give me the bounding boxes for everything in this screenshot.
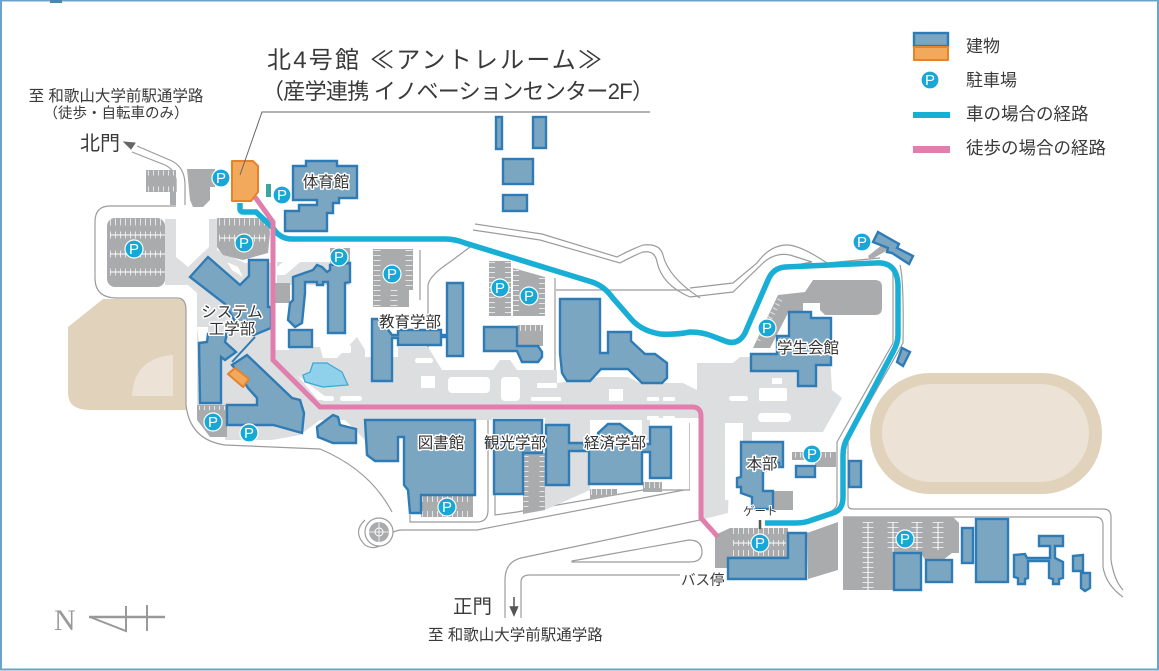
- walking route: [255, 197, 718, 537]
- gate marker: [759, 520, 761, 529]
- station route label: 至 和歌山大学前駅通学路: [428, 626, 603, 644]
- arrow: north gate: [124, 142, 135, 149]
- building labels: 観光学部: [484, 434, 546, 452]
- target building: north 4: [232, 161, 258, 201]
- building labels: 本部: [746, 455, 778, 473]
- car route: [240, 203, 898, 523]
- student hall: [751, 312, 831, 386]
- north compass: N: [54, 604, 76, 637]
- tourism: [494, 420, 542, 494]
- building labels: 教育学部: [379, 313, 441, 331]
- parking markers: P: [216, 170, 226, 187]
- roundabout: [365, 518, 393, 546]
- building labels: [201, 173, 839, 473]
- parking markers: P: [524, 288, 534, 305]
- north gate labels: 北門: [80, 132, 120, 155]
- gate label: ゲート: [743, 505, 778, 518]
- parking markers: P: [807, 446, 817, 463]
- north compass: [54, 604, 165, 637]
- subtitle: （産学連携 イノベーションセンター2F）: [262, 79, 654, 104]
- legend: car route: 車の場合の経路: [966, 104, 1089, 124]
- economics: [546, 424, 671, 485]
- parking lots: [107, 169, 959, 590]
- south east buildings: [728, 519, 1090, 591]
- title: 北4号館 ≪アントレルーム≫: [267, 47, 602, 74]
- arrow: main gate: [510, 597, 518, 615]
- north gate labels: 至 和歌山大学前駅通学路: [29, 87, 204, 105]
- gymnasium: [285, 161, 357, 231]
- legend: car route: [913, 104, 1089, 124]
- bus stop label: バス停: [681, 572, 724, 589]
- teal structure: [266, 184, 271, 197]
- north gate labels: [29, 87, 204, 155]
- parking markers: P: [244, 425, 254, 442]
- main gate label: 正門: [453, 596, 492, 618]
- legend: building: 建物: [966, 37, 1000, 56]
- building labels: 図書館: [418, 434, 464, 452]
- legend: parking: [921, 71, 1017, 90]
- legend: parking: 駐車場: [966, 71, 1017, 90]
- parking markers: [125, 169, 914, 552]
- white islands: [176, 219, 791, 500]
- legend: [913, 33, 1106, 158]
- headquarters: [737, 442, 783, 509]
- middle buildings: [288, 263, 356, 443]
- parking markers: P: [129, 241, 139, 258]
- parking markers: P: [387, 266, 397, 283]
- pond: [303, 363, 348, 387]
- building labels: 工学部: [209, 320, 255, 338]
- north east buildings: [849, 232, 913, 487]
- parking markers: P: [755, 535, 765, 552]
- legend: walking route: 徒歩の場合の経路: [966, 138, 1106, 158]
- parking markers: P: [495, 280, 505, 297]
- small orange building: [228, 368, 249, 387]
- building labels: システム: [201, 304, 263, 321]
- legend: building: [914, 33, 1000, 60]
- north gate labels: （徒歩・自転車のみ）: [44, 105, 188, 122]
- parking markers: P: [857, 234, 867, 251]
- buildings: [190, 117, 1090, 591]
- parking markers: P: [277, 187, 287, 204]
- legend: parking: P: [925, 72, 935, 89]
- building labels: 体育館: [303, 173, 349, 191]
- parking markers: P: [762, 320, 772, 337]
- library: [365, 420, 475, 513]
- baseball field: [68, 299, 186, 410]
- top buildings: [496, 117, 546, 211]
- parking markers: P: [334, 249, 344, 266]
- road network: [95, 146, 1123, 618]
- central ground: [165, 219, 842, 520]
- education: [372, 283, 463, 381]
- building labels: 学生会館: [777, 339, 839, 357]
- parking markers: P: [208, 414, 218, 431]
- parking markers: P: [239, 235, 249, 252]
- lot fills: [107, 169, 959, 590]
- stall markings: [110, 173, 938, 590]
- leader line: [240, 112, 650, 175]
- system engineering: [190, 257, 304, 433]
- parking markers: P: [442, 499, 452, 516]
- building labels: 経済学部: [584, 434, 646, 452]
- athletic track: [870, 373, 1102, 494]
- parking markers: P: [900, 531, 910, 548]
